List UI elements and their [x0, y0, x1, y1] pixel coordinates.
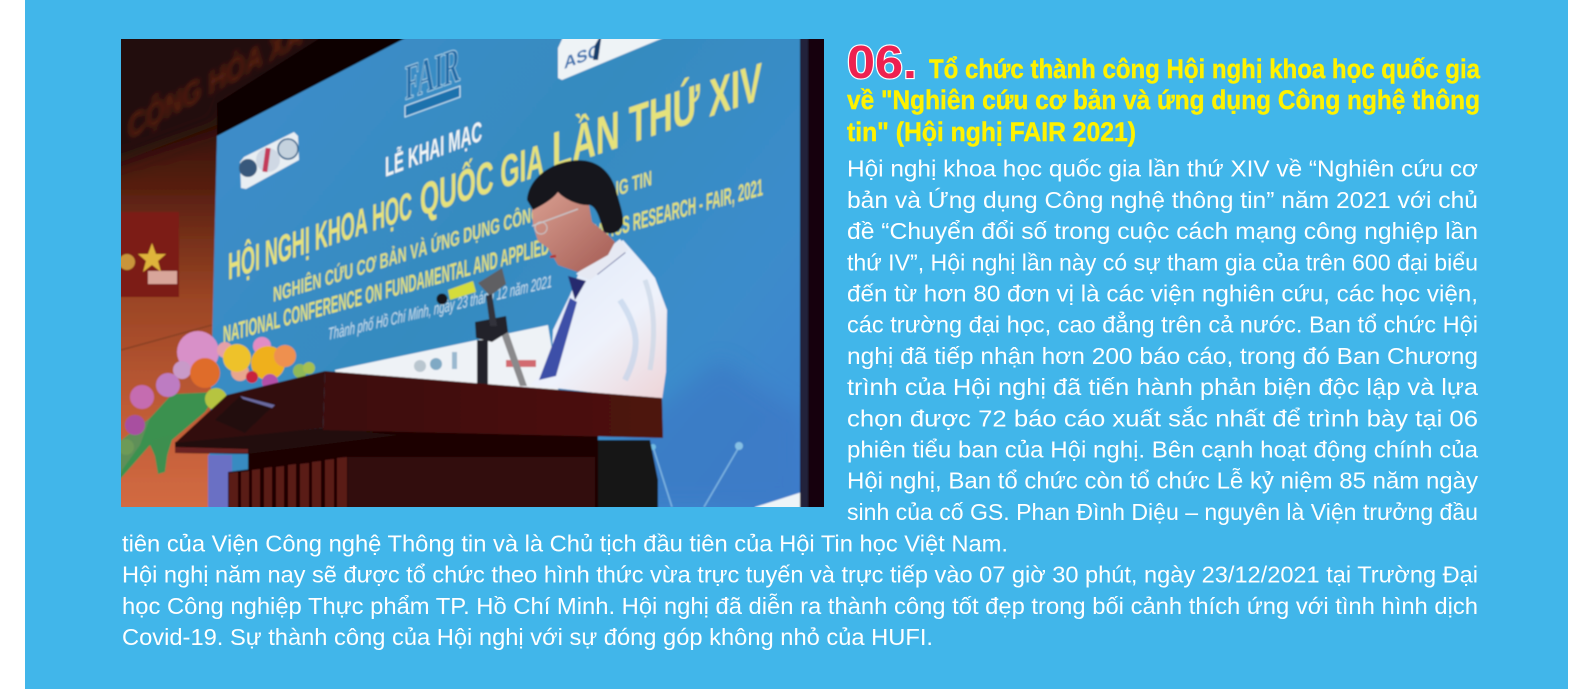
screen title: QUỐC GIA — [420, 133, 544, 226]
photo: speaker at FAIR 2021 conference: NATIONAL CONFERENCE ON FUNDAMENTAL AND APPLIED INFORMATICS RESEARCH - FAIR, 2021 — [223, 174, 763, 349]
trousers — [596, 439, 659, 507]
screen title — [228, 51, 762, 289]
number 06: 06. — [847, 36, 917, 88]
body text: các trường đại học, cao đẳng trên cả nước. Ban tổ chức Hội — [847, 310, 1478, 338]
body text: nghị đã tiếp nhận hơn 200 báo cáo, trong đó Ban Chương — [847, 343, 1478, 369]
heading: Tổ chức thành công Hội nghị khoa học quốc gia — [929, 54, 1480, 84]
microphone and stand — [436, 268, 527, 386]
body text — [122, 156, 1479, 650]
body text: chọn được 72 báo cáo xuất sắc nhất để trình bày tại 06 — [847, 405, 1478, 431]
hair — [527, 160, 623, 234]
collar — [576, 239, 628, 280]
body text: phiên tiểu ban của Hội nghị. Bên cạnh hoạt động chính của — [847, 436, 1479, 462]
screen opening ceremony label: LỄ KHAI MẠC — [385, 114, 482, 184]
photo: speaker at FAIR 2021 conference: FAIR — [405, 36, 460, 112]
body text: trình của Hội nghị đã tiến hành phản biện độc lập và lựa — [847, 374, 1479, 400]
ASC logo: ASC — [564, 40, 600, 73]
screen band logos — [414, 352, 536, 372]
body text: tiên của Viện Công nghệ Thông tin và là Chủ tịch đầu tiên của Hội Tin học Việt Nam. — [122, 530, 1008, 556]
heading — [847, 54, 1480, 147]
screen network lines — [653, 447, 739, 507]
body text: Hội nghị năm nay sẽ được tổ chức theo hình thức vừa trực tuyến và trực tiếp vào 07 giờ 30 phút, ngày 23/12/2021 tại Trường Đại — [122, 562, 1478, 588]
tie and lanyard — [568, 276, 586, 300]
screen title: LẦN THỨ XIV — [552, 51, 762, 182]
body text: Covid-19. Sự thành công của Hội nghị với sự đóng góp không nhỏ của HUFI. — [122, 624, 933, 650]
screen date line: Thành phố Hồ Chí Minh, ngày 23 tháng 12 năm 2021 — [328, 271, 552, 344]
heading: về "Nghiên cứu cơ bản và ứng dụng Công nghệ thông — [847, 85, 1480, 115]
strip below screen — [208, 455, 232, 513]
screen title: HỘI NGHỊ KHOA HỌC — [228, 183, 412, 289]
organiser logos pill — [239, 132, 299, 189]
body text: Hội nghị, Ban tổ chức còn tổ chức Lễ kỷ niệm 85 năm ngày — [847, 468, 1478, 494]
stage wall — [121, 39, 403, 507]
body text: đề “Chuyển đổi số trong cuộc cách mạng công nghiệp lần — [847, 218, 1478, 244]
flower arrangement — [115, 331, 315, 485]
photo: speaker at FAIR 2021 conference — [121, 39, 824, 507]
body text: thứ IV”, Hội nghị lần này có sự tham gia của trên 600 đại biểu — [847, 249, 1478, 275]
ASC logo — [556, 39, 664, 81]
heading: tin" (Hội nghị FAIR 2021) — [847, 117, 1136, 147]
glasses — [532, 209, 578, 226]
screen subtitle: NGHIÊN CỨU CƠ BẢN VÀ ỨNG DỤNG CÔNG NGHỆ THÔNG TIN — [273, 165, 652, 307]
lectern fluted base — [227, 456, 596, 507]
right dark frame — [799, 39, 824, 507]
body text: sinh của cố GS. Phan Đình Diệu – nguyên là Viện trưởng đầu — [847, 499, 1478, 525]
FAIR logo — [405, 36, 460, 117]
flag — [115, 212, 179, 297]
body text: bản và Ứng dụng Công nghệ thông tin” năm 2021 với chủ — [847, 187, 1478, 213]
face — [532, 190, 615, 272]
projection screen — [208, 33, 803, 513]
fern — [121, 392, 209, 480]
black ceiling wedge — [216, 39, 400, 136]
body text: Hội nghị khoa học quốc gia lần thứ XIV về “Nghiên cứu cơ — [847, 156, 1478, 182]
body text: đến từ hơn 80 đơn vị là các viện nghiên cứu, các học viện, — [847, 280, 1478, 306]
body text: học Công nghiệp Thực phẩm TP. Hồ Chí Minh. Hội nghị đã diễn ra thành công tốt đẹp trong bối cảnh thích ứng với tình hình dịch — [122, 593, 1478, 619]
speaker — [527, 160, 667, 513]
screen white band — [335, 325, 560, 400]
lectern — [175, 371, 663, 513]
shirt — [551, 239, 668, 400]
screen darker lower triangle — [596, 370, 786, 500]
